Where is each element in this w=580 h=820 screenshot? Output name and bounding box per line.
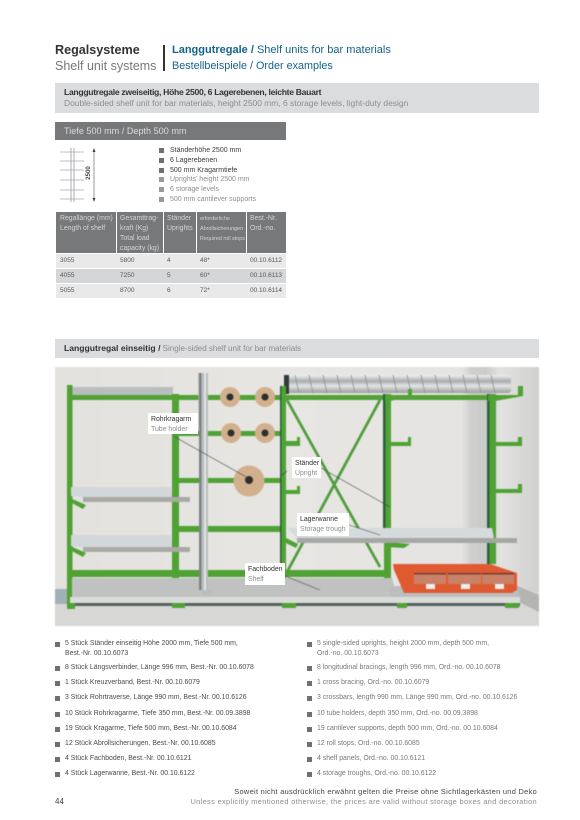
callout: storage trough: [297, 513, 349, 536]
item: 10 Stück Rohrkragarme, Tiefe 350 mm, Best.-Nr. 00.09.3898: [65, 710, 250, 717]
bullet: [307, 666, 312, 671]
bullet: [55, 757, 60, 762]
cross bracing: [287, 400, 380, 572]
spec text: Ständerhöhe 2500 mm: [170, 147, 241, 154]
bullet: [159, 148, 164, 153]
bullet: [307, 757, 312, 762]
bullet: [307, 727, 312, 732]
spec text: 500 mm cantilever supports: [170, 196, 256, 203]
photo: green cantilever shelf unit: [54, 366, 540, 626]
bullet: [55, 696, 60, 701]
row 1: 3055: [60, 257, 74, 264]
bullet: [55, 681, 60, 686]
small profile on top left: [71, 387, 173, 395]
row 3: 00.10.6114: [250, 287, 282, 294]
callout: upright: Ständer: [295, 460, 319, 467]
callout: upright: Upright: [295, 470, 317, 476]
callout: upright: [292, 457, 321, 478]
item: 1 Stück Kreuzverband, Best.-Nr. 00.10.6079: [65, 679, 200, 686]
row 1: 48*: [200, 257, 210, 264]
spec text: Uprights’ height 2500 mm: [170, 176, 250, 183]
header cell: Best.-Nr.: [250, 215, 277, 222]
cantilever arms: [70, 386, 523, 557]
panel: single-sided heading bar: Langgutregal einseitig / Single-sided shelf unit for bar materials: [64, 343, 301, 353]
footnote: English: Unless explicitly mentioned otherwise, the prices are valid without storage boxes and decoration: [190, 797, 537, 806]
diagram: shelf side view with 2500 dimension: 2500: [86, 166, 92, 180]
header cell: erforderliche: [200, 216, 230, 222]
row 1: 00.10.6112: [250, 257, 282, 264]
list: German parts: [55, 640, 254, 777]
red storage boxes: [393, 564, 517, 593]
vertical metal tube: [198, 373, 212, 595]
row 2: 7250: [120, 272, 134, 279]
item: 4 Stück Lagerwanne, Best.-Nr. 00.10.6122: [65, 770, 195, 777]
row 1: 5800: [120, 257, 134, 264]
horizontal beams: [70, 395, 490, 577]
item: Best.-Nr. 00.10.6073: [65, 650, 128, 657]
row 3: 6: [167, 287, 171, 294]
panel: single-sided heading bar: [55, 339, 539, 358]
header cell: capacity (kg): [120, 245, 159, 252]
callout: shelf: [245, 563, 285, 585]
storage trough: [288, 528, 494, 538]
row 3: 72*: [200, 287, 210, 294]
table: order data: [56, 212, 286, 298]
subheading: order examples: Bestellbeispiele / Order examples: [172, 60, 333, 72]
heading: Langgutregale: Langgutregale / Shelf units for bar materials: [172, 44, 391, 56]
bullet: [55, 642, 60, 647]
item: 19 cantilever supports, depth 500 mm, Ord.-no. 00.10.6084: [317, 725, 498, 732]
bullet: [55, 727, 60, 732]
list: English parts: [307, 640, 517, 777]
bullet: [159, 158, 164, 163]
item: 4 shelf panels, Ord.-no. 00.10.6121: [317, 755, 425, 762]
floor: [55, 592, 539, 626]
row 2: [56, 269, 286, 283]
item: [317, 640, 489, 657]
bullet: [159, 197, 164, 202]
heading: Regalsysteme: Regalsysteme: [55, 43, 140, 57]
header cell: Gesamttrag-: [120, 215, 158, 222]
bullet: [159, 187, 164, 192]
row 1: [56, 254, 286, 268]
callout: tube holder: Rohrkragarm: [151, 416, 191, 423]
bullet: [307, 642, 312, 647]
bullet: [55, 742, 60, 747]
bullet: [307, 712, 312, 717]
panel: depth heading bar: Tiefe 500 mm / Depth 500 mm: [64, 126, 186, 136]
page number: 44: [55, 797, 64, 806]
header cell: Uprights: [167, 225, 193, 232]
item: 1 cross bracing, Ord.-no. 00.10.6079: [317, 679, 429, 686]
header cell: [247, 212, 286, 253]
callout: shelf: Fachboden: [248, 566, 282, 573]
bullet: [159, 168, 164, 173]
bottom shelf: [72, 578, 394, 597]
header cell: [164, 212, 196, 253]
item: 10 tube holders, depth 350 mm, Ord.-no. 00.09.3898: [317, 710, 478, 717]
row 1: 4: [167, 257, 171, 264]
item: Ord.-no. 00.10.6073: [317, 650, 379, 657]
left shelves: [71, 487, 190, 552]
header: product title: [172, 44, 391, 72]
row 3: [56, 284, 286, 298]
header cell: Required roll stops: [200, 236, 245, 242]
row 2: 5: [167, 272, 171, 279]
spec text: 500 mm Kragarmtiefe: [170, 167, 237, 174]
spiral tube: [284, 375, 511, 394]
item: 3 crossbars, length 990 mm, Länge 990 mm, Ord.-no. 00.10.6126: [317, 694, 517, 701]
callout: storage trough: Lagerwanne: [300, 516, 338, 523]
row 3: 8700: [120, 287, 134, 294]
item: 12 roll stops, Ord.-no. 00.10.6085: [317, 740, 420, 747]
row 2: 60*: [200, 272, 210, 279]
bullet: [307, 742, 312, 747]
list: upright specifications: [159, 146, 256, 203]
row 2: 00.10.6113: [250, 272, 282, 279]
header cell: Regallänge (mm): [60, 215, 113, 222]
header cell: Total load: [120, 235, 150, 242]
row 2: 4055: [60, 272, 74, 279]
item: 3 Stück Rohrtraverse, Länge 990 mm, Best.-Nr. 00.10.6126: [65, 694, 247, 701]
item: 8 Stück Längsverbinder, Länge 996 mm, Best.-Nr. 00.10.6078: [65, 664, 254, 671]
header cell: [197, 212, 246, 253]
callout: tube holder: [148, 413, 198, 434]
diagram: shelf side view with 2500 dimension: [60, 148, 96, 202]
bullet: [55, 666, 60, 671]
header cell: Ord.-no.: [250, 225, 275, 232]
bullet: [307, 681, 312, 686]
spec text: 6 storage levels: [170, 186, 219, 193]
item: 5 Stück Ständer einseitig Höhe 2000 mm, Tiefe 500 mm,: [65, 640, 238, 647]
header cell: kraft (Kg): [120, 225, 148, 232]
item: 5 single-sided uprights, height 2000 mm, depth 500 mm,: [317, 640, 489, 647]
item: 8 longitudinal bracings, length 996 mm, Ord.-no. 00.10.6078: [317, 664, 500, 671]
bullet: [55, 712, 60, 717]
panel: depth heading bar: [55, 122, 286, 140]
bullet: [55, 772, 60, 777]
item: 4 Stück Fachboden, Best.-Nr. 00.10.6121: [65, 755, 191, 762]
spools: [220, 387, 275, 496]
callout: tube holder: Tube holder: [151, 426, 188, 432]
footnote: German: Soweit nicht ausdrücklich erwähnt gelten die Preise ohne Sichtlagerkästen und Deko: [234, 787, 537, 796]
header cell: Ständer: [167, 215, 191, 222]
item: 19 Stück Kragarme, Tiefe 500 mm, Best.-Nr. 00.10.6084: [65, 725, 237, 732]
header cell: [117, 212, 163, 253]
header cell: [56, 212, 116, 253]
vertical title divider: [163, 45, 164, 71]
item: 4 storage troughs, Ord.-no. 00.10.6122: [317, 770, 436, 777]
header cell: Abrollsicherungen: [200, 226, 243, 232]
leader lines: [175, 437, 390, 590]
text: German heading: Langgutregale zweiseitig, Höhe 2500, 6 Lagerebenen, leichte Bauart: [64, 87, 321, 97]
bullet: [307, 772, 312, 777]
header cell: Length of shelf: [60, 225, 105, 232]
spec text: 6 Lagerebenen: [170, 157, 217, 164]
bullet: [307, 696, 312, 701]
bullet: [159, 177, 164, 182]
callout: storage trough: Storage trough: [300, 526, 346, 532]
text: English heading: Double-sided shelf unit for bar materials, height 2500 mm, 6 storage levels, light-duty design: [64, 98, 408, 108]
item: 12 Stück Abrollsicherungen, Best.-Nr. 00.10.6085: [65, 740, 216, 747]
header: title block: [55, 43, 156, 73]
row 3: 5055: [60, 287, 74, 294]
item: [65, 640, 238, 657]
heading: Shelf unit systems: Shelf unit systems: [55, 59, 156, 73]
callout: shelf: Shelf: [248, 576, 264, 582]
panel: double-sided heading bar: [55, 83, 539, 113]
uprights: [67, 385, 496, 609]
